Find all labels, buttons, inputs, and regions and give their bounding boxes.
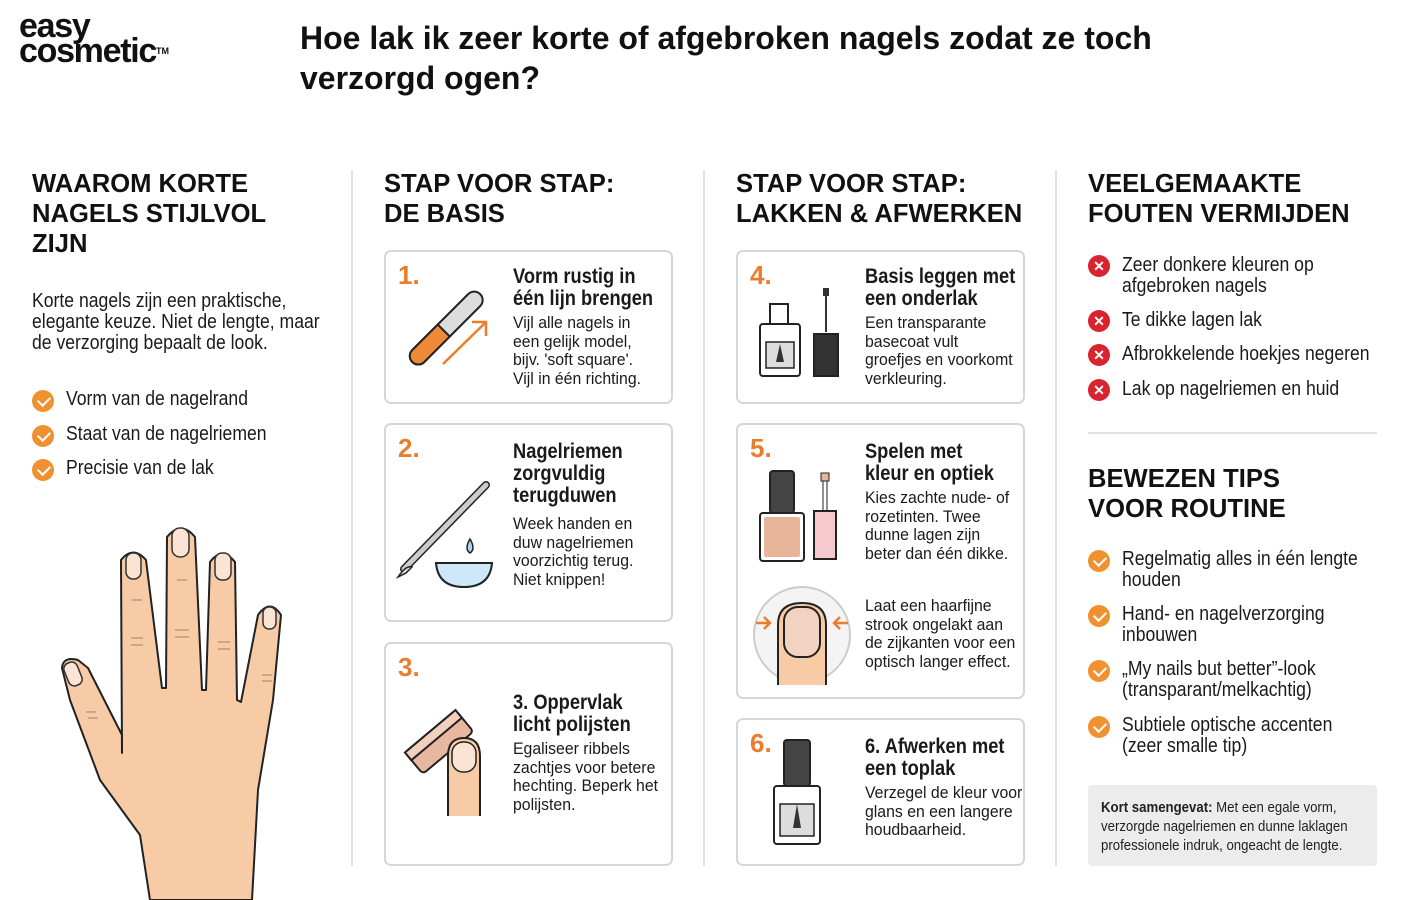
- card 6: een toplak: [865, 757, 955, 780]
- tips list: Hand- en nagelverzorging: [1122, 603, 1325, 625]
- card 4: verkleuring.: [865, 368, 947, 388]
- tips list: „My nails but better”-look: [1122, 658, 1316, 680]
- title: [300, 20, 1152, 96]
- mistakes list: ✕: [1093, 258, 1105, 274]
- summary box: Kort samengevat: Met een egale vorm,: [1101, 799, 1336, 816]
- card 5: beter dan één dikke.: [865, 544, 1008, 562]
- heading tips: [1088, 465, 1286, 523]
- card 5: rozetinten. Twee: [865, 506, 981, 526]
- card 1: Vijl alle nagels in: [513, 313, 630, 332]
- mistakes list: ✕: [1093, 313, 1105, 329]
- checklist: Vorm van de nagelrand: [66, 388, 248, 410]
- card 4: Een transparante: [865, 313, 986, 332]
- mistakes list: [1088, 254, 1370, 401]
- panel: fouten en tips: [1088, 170, 1377, 866]
- panel: de basis: [384, 170, 614, 228]
- mistakes list: Lak op nagelriemen en huid: [1122, 378, 1339, 400]
- logo: [19, 7, 169, 70]
- card 6: houdbaarheid.: [865, 820, 966, 839]
- summary box: verzorgde nagelriemen en dunne laklagen: [1101, 818, 1348, 835]
- checklist: Staat van de nagelriemen: [66, 423, 267, 445]
- card 6: glans en een langere: [865, 802, 1013, 820]
- card 1: één lijn brengen: [513, 287, 653, 310]
- heading col4: VEELGEMAAKTE: [1088, 170, 1301, 198]
- text: optical tip: strook ongelakt aan: [865, 614, 1003, 634]
- heading col4: [1088, 170, 1350, 228]
- checklist: [32, 388, 267, 481]
- card 3: hechting. Beperk het: [513, 776, 658, 795]
- mistakes list: afgebroken nagels: [1122, 275, 1267, 297]
- card 6: [736, 718, 1025, 866]
- card 4: 4.: [750, 260, 772, 290]
- card 1: een gelijk model,: [513, 332, 632, 350]
- card 6: 6.: [750, 728, 772, 758]
- heading col3: LAKKEN & AFWERKEN: [736, 200, 1022, 228]
- icon: buffer and finger: [404, 708, 481, 816]
- card 5: [736, 423, 1025, 699]
- heading col1: [32, 170, 266, 258]
- heading col2: DE BASIS: [384, 200, 505, 228]
- tips list: (zeer smalle tip): [1122, 735, 1247, 757]
- title: verzorgd ogen?: [300, 60, 540, 96]
- panel: waarom korte nagels: [32, 170, 320, 481]
- heading col3: [736, 170, 1022, 228]
- card 1: 1.: [398, 260, 420, 290]
- card 4: een onderlak: [865, 287, 978, 310]
- card 3: polijsten.: [513, 794, 575, 814]
- card 5: 5.: [750, 433, 772, 463]
- tips list: Regelmatig alles in één lengte: [1122, 548, 1358, 570]
- card 3: Egaliseer ribbels: [513, 739, 630, 758]
- card 6: Verzegel de kleur voor: [865, 783, 1022, 802]
- card 5: Spelen met: [865, 440, 962, 463]
- mistakes list: Zeer donkere kleuren op: [1122, 254, 1314, 276]
- tips list: (transparant/melkachtig): [1122, 679, 1312, 701]
- heading tips: BEWEZEN TIPS: [1088, 465, 1280, 493]
- text: optical tip: optisch langer effect.: [865, 652, 1011, 670]
- card 2: Niet knippen!: [513, 570, 605, 588]
- card 5: kleur en optiek: [865, 462, 994, 485]
- text: optical tip: [865, 596, 1015, 670]
- heading col1: WAAROM KORTE: [32, 170, 248, 198]
- card 1: bijv. 'soft square'.: [513, 350, 633, 369]
- icon: cuticle pusher and bowl: [396, 481, 494, 588]
- card 4: Basis leggen met: [865, 265, 1015, 288]
- mistakes list: Afbrokkelende hoekjes negeren: [1122, 343, 1370, 365]
- card 2: terugduwen: [513, 484, 617, 507]
- mistakes list: Te dikke lagen lak: [1122, 309, 1262, 331]
- checklist: Precisie van de lak: [66, 457, 214, 479]
- intro text: Korte nagels zijn een praktische,: [32, 290, 286, 312]
- heading tips: VOOR ROUTINE: [1088, 495, 1286, 523]
- tips list: [1088, 548, 1358, 757]
- icon: nail optical trick: [753, 586, 851, 685]
- card 1: [384, 250, 673, 404]
- icon: nail file: [408, 290, 488, 366]
- card 3: 3. Oppervlak: [513, 691, 623, 714]
- icon: colour bottles: [759, 470, 837, 562]
- tips list: houden: [1122, 569, 1181, 591]
- text: optical tip: de zijkanten voor een: [865, 633, 1015, 652]
- card 4: [736, 250, 1025, 404]
- heading col1: ZIJN: [32, 230, 87, 258]
- panel: lakken en afwerken: [736, 170, 1022, 228]
- card 2: zorgvuldig: [513, 462, 605, 485]
- card 3: 3.: [398, 652, 420, 682]
- intro text: de verzorging bepaalt de look.: [32, 332, 268, 354]
- heading col2: [384, 170, 614, 228]
- heading col3: STAP VOOR STAP:: [736, 170, 966, 198]
- card 3: zachtjes voor betere: [513, 758, 655, 776]
- card 2: duw nagelriemen: [513, 532, 633, 552]
- tips list: Subtiele optische accenten: [1122, 714, 1332, 736]
- card 1: Vorm rustig in: [513, 265, 635, 288]
- card 2: Nagelriemen: [513, 440, 623, 463]
- card 2: Week handen en: [513, 514, 632, 533]
- card 5: dunne lagen zijn: [865, 525, 980, 544]
- card 4: groefjes en voorkomt: [865, 350, 1013, 369]
- text: optical tip: Laat een haarfijne: [865, 596, 992, 615]
- card 2: voorzichtig terug.: [513, 551, 633, 570]
- heading col2: STAP VOOR STAP:: [384, 170, 614, 198]
- heading col1: NAGELS STIJLVOL: [32, 200, 266, 228]
- tips list: inbouwen: [1122, 624, 1197, 646]
- card 3: [384, 642, 673, 866]
- icon: base coat bottle: [759, 288, 839, 377]
- intro text: [32, 290, 320, 354]
- illustration: hand: [61, 527, 282, 900]
- mistakes list: ✕: [1093, 347, 1105, 363]
- icon: top coat bottle: [773, 739, 821, 845]
- card 3: licht polijsten: [513, 713, 631, 736]
- card 2: 2.: [398, 433, 420, 463]
- mistakes list: ✕: [1093, 382, 1105, 398]
- logo: easy: [19, 7, 89, 45]
- summary box: professionele indruk, ongeacht de lengte.: [1101, 837, 1342, 854]
- card 1: Vijl in één richting.: [513, 368, 641, 388]
- card 2: [384, 423, 673, 622]
- title: Hoe lak ik zeer korte of afgebroken nagels zodat ze toch: [300, 20, 1152, 56]
- card 4: basecoat vult: [865, 332, 958, 350]
- logo: cosmeticTM: [19, 32, 169, 70]
- summary box: [1088, 785, 1377, 866]
- intro text: elegante keuze. Niet de lengte, maar: [32, 311, 320, 333]
- card 6: 6. Afwerken met: [865, 735, 1004, 758]
- heading col4: FOUTEN VERMIJDEN: [1088, 200, 1350, 228]
- card 5: Kies zachte nude- of: [865, 488, 1009, 507]
